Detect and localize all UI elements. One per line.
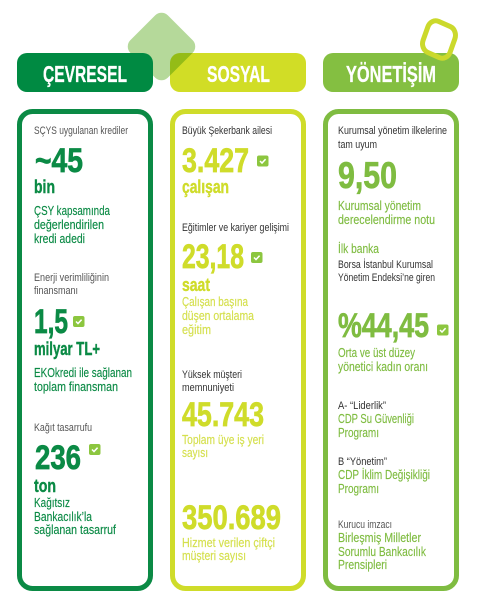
text block: kurucu imzacı: Kurucu imzacı xyxy=(338,519,392,531)
text block: A- Liderlik: Programı xyxy=(338,425,379,440)
stat: 350.689: müşteri sayısı xyxy=(182,548,246,563)
text block: kurucu imzacı xyxy=(338,519,426,572)
text block: B Yönetim: CDP İklim Değişikliği xyxy=(338,467,430,482)
stat: 45.743: 45.743 xyxy=(182,396,264,434)
text block: kurucu imzacı: Birleşmiş Milletler xyxy=(338,530,422,545)
stat: 23,18 saat: düşen ortalama xyxy=(182,308,255,323)
stat: 45.743: sayısı xyxy=(182,445,208,460)
stat: 236 ton: sağlanan tasarruf xyxy=(34,522,116,537)
stat: 3.427 çalışan: çalışan xyxy=(182,176,229,197)
header pill: SOSYAL xyxy=(170,53,306,92)
stat: 9,50 xyxy=(338,125,447,227)
stat: 45.743 xyxy=(182,369,264,460)
stat: 236 ton xyxy=(34,422,116,537)
stat: 23,18 saat: Çalışan başına xyxy=(182,294,249,309)
text block: ilk banka: Borsa İstanbul Kurumsal xyxy=(338,258,433,271)
text block: ilk banka: İlk banka xyxy=(338,241,380,256)
stat: 3.427 çalışan: Büyük Şekerbank ailesi xyxy=(182,125,272,137)
stat: 236 ton: Kağıt tasarrufu xyxy=(34,422,92,434)
text block: A- Liderlik: CDP Su Güvenliği xyxy=(338,411,414,426)
stat: 45.743: Yüksek müşteri xyxy=(182,369,242,381)
stat: ~45 bin: bin xyxy=(34,176,55,197)
text block: B Yönetim: Programı xyxy=(338,481,379,496)
stat: 3.427 çalışan: 3.427 xyxy=(182,142,249,180)
stat: %44,45: yönetici kadın oranı xyxy=(338,359,428,374)
icon: check xyxy=(437,324,448,336)
stat: 45.743: Toplam üye iş yeri xyxy=(182,432,264,447)
header pill: YÖNETİŞİM xyxy=(323,53,459,92)
stat: 350.689: 350.689 xyxy=(182,499,281,537)
decorative ring on YÖNETİŞİM header xyxy=(420,18,458,61)
stat: ~45 bin: ~45 xyxy=(35,142,83,180)
stat: 1,5 milyar TL+: EKOkredi ile sağlanan xyxy=(34,365,132,380)
header pill: SOSYAL: SOSYAL xyxy=(207,61,270,87)
icon: check xyxy=(251,252,262,263)
text block: A- Liderlik: A- “Liderlik” xyxy=(338,400,386,412)
text block: kurucu imzacı: Prensipleri xyxy=(338,557,387,572)
stat: 9,50: Kurumsal yönetim xyxy=(338,198,421,213)
stat: 9,50: 9,50 xyxy=(338,155,397,196)
stat: ~45 bin: değerlendirilen xyxy=(34,217,104,232)
icon: check xyxy=(89,444,100,455)
stat: 350.689 xyxy=(182,499,281,563)
stat: ~45 bin: kredi adedi xyxy=(34,231,85,246)
stat: 236 ton: ton xyxy=(34,475,56,496)
text block: B Yönetim xyxy=(338,456,430,496)
stat: 23,18 saat: 23,18 xyxy=(182,238,244,276)
panel: çevresel xyxy=(20,112,150,588)
stat: 45.743: memnuniyeti xyxy=(182,382,234,394)
stat: ~45 bin xyxy=(34,125,128,246)
stat: 236 ton: Bankacılık’la xyxy=(34,509,93,524)
stat: 1,5 milyar TL+: toplam finansman xyxy=(34,379,118,394)
header pill: YÖNETİŞİM: YÖNETİŞİM xyxy=(346,61,436,87)
panel: yönetişim xyxy=(326,112,456,588)
stat: ~45 bin: ÇSY kapsamında xyxy=(34,203,111,218)
stat: 350.689: Hizmet verilen çiftçi xyxy=(182,535,275,550)
stat: 23,18 saat: Eğitimler ve kariyer gelişimi xyxy=(182,222,289,234)
text block: kurucu imzacı: Sorumlu Bankacılık xyxy=(338,544,426,559)
stat: 1,5 milyar TL+: Enerji verimliliğinin xyxy=(34,272,109,284)
stat: ~45 bin: SÇYS uygulanan krediler xyxy=(34,125,128,137)
stat: 236 ton: Kağıtsız xyxy=(34,495,70,510)
stat: 23,18 saat: eğitim xyxy=(182,322,211,337)
stat: 1,5 milyar TL+ xyxy=(34,272,132,394)
text block: A- Liderlik xyxy=(338,400,414,440)
header pill: ÇEVRESEL xyxy=(17,53,153,92)
header pill: ÇEVRESEL: ÇEVRESEL xyxy=(43,61,127,87)
stat: 23,18 saat: saat xyxy=(182,274,210,295)
icon: check xyxy=(73,316,84,327)
panel: sosyal xyxy=(172,112,304,588)
text block: B Yönetim: B “Yönetim” xyxy=(338,456,387,468)
text block: ilk banka: Yönetim Endeksi’ne giren xyxy=(338,272,435,284)
panel border: çevresel xyxy=(20,112,150,588)
panel border: sosyal xyxy=(172,112,304,588)
stat: 9,50: derecelendirme notu xyxy=(338,212,435,227)
stat: 9,50: tam uyum xyxy=(338,139,377,151)
panel border: yönetişim xyxy=(326,112,456,588)
stat: %44,45: Orta ve üst düzey xyxy=(338,345,415,360)
stat: %44,45: %44,45 xyxy=(338,307,429,345)
decorative diamond behind headers xyxy=(124,9,199,84)
stat: 3.427 çalışan xyxy=(182,125,272,197)
stat: 1,5 milyar TL+: milyar TL+ xyxy=(34,338,100,359)
stat: 1,5 milyar TL+: finansmanı xyxy=(34,285,78,297)
stat: 9,50: Kurumsal yönetim ilkelerine xyxy=(338,125,447,137)
stat: 236 ton: 236 xyxy=(35,439,81,477)
icon: check xyxy=(257,156,268,166)
stat: 1,5 milyar TL+: 1,5 xyxy=(34,303,68,341)
stat: %44,45 xyxy=(338,307,448,374)
stat: 23,18 saat xyxy=(182,222,289,337)
text block: ilk banka xyxy=(338,241,435,284)
